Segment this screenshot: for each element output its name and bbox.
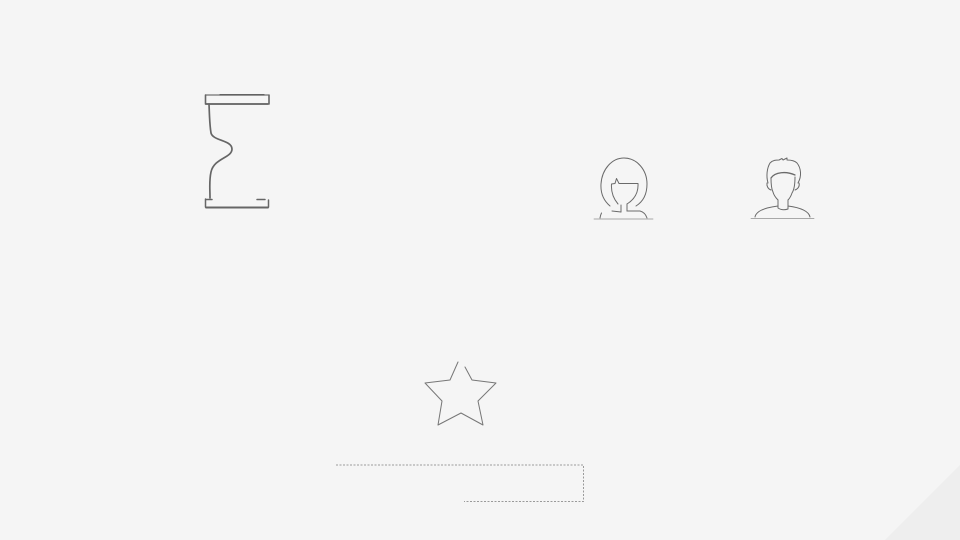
icon: man avatar bbox=[751, 158, 814, 218]
icon: woman avatar bbox=[594, 158, 653, 219]
corner triangle bbox=[885, 465, 960, 540]
dashed outline box bbox=[336, 465, 584, 502]
icon: hourglass bbox=[206, 95, 269, 208]
icon: star outline bbox=[425, 362, 496, 425]
